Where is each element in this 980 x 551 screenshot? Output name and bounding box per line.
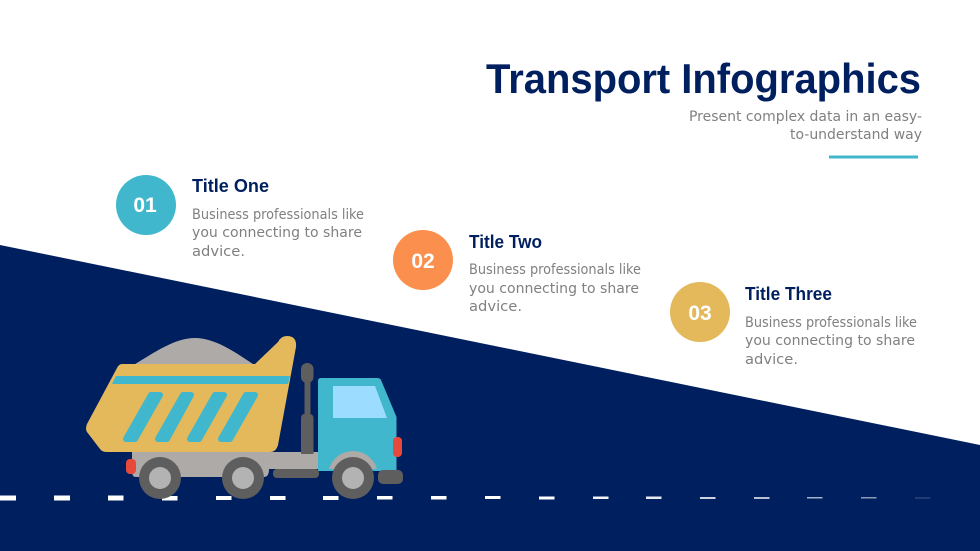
body text 02: Business professionals like [469,262,641,278]
body text 01: you connecting to share [192,225,362,241]
rear wheel 1 [139,457,181,499]
body text 03 [745,315,917,368]
badge 02: 02 [411,250,435,273]
bed slats [126,395,255,439]
front light [393,437,402,457]
dump bed [86,336,296,452]
body text 01: Business professionals like [192,207,364,223]
hydraulic arm [301,363,314,454]
body text 01 [192,207,364,260]
body text 02: advice. [469,299,522,315]
subtitle: to-understand way [790,127,922,143]
truck chassis [132,452,318,477]
step 02 [393,230,641,315]
subtitle: Present complex data in an easy- [689,109,922,125]
front bumper [378,470,403,484]
heading: Title Two: Title Two [469,232,542,252]
body text 02 [469,262,641,315]
truck load: gravel [132,338,256,366]
badge 02 [393,230,453,290]
badge 03 [670,282,730,342]
body text 01: advice. [192,244,245,260]
body text 03: Business professionals like [745,315,917,331]
heading: Title One: Title One [192,176,269,196]
subtitle [689,109,922,143]
heading: Title Three: Title Three [745,284,832,304]
step 03 [670,282,917,368]
title: Transport Infographics [486,55,921,102]
rear wheel 2 [222,457,264,499]
badge 01: 01 [133,194,157,217]
badge 01 [116,175,176,235]
icon: dump truck [86,336,403,499]
body text 03: you connecting to share [745,333,915,349]
body text 03: advice. [745,352,798,368]
badge 03: 03 [688,302,712,325]
rear bumper light [126,459,136,474]
truck cab [318,378,396,471]
road dashes [0,496,930,500]
bed stripe [112,376,290,384]
title accent line [829,156,918,158]
step 01 [116,175,364,260]
body text 02: you connecting to share [469,281,639,297]
chassis step [273,469,319,478]
front wheel [332,457,374,499]
background: navy slope [0,245,980,551]
cab window [333,386,387,418]
cab wheel arch [329,451,377,469]
